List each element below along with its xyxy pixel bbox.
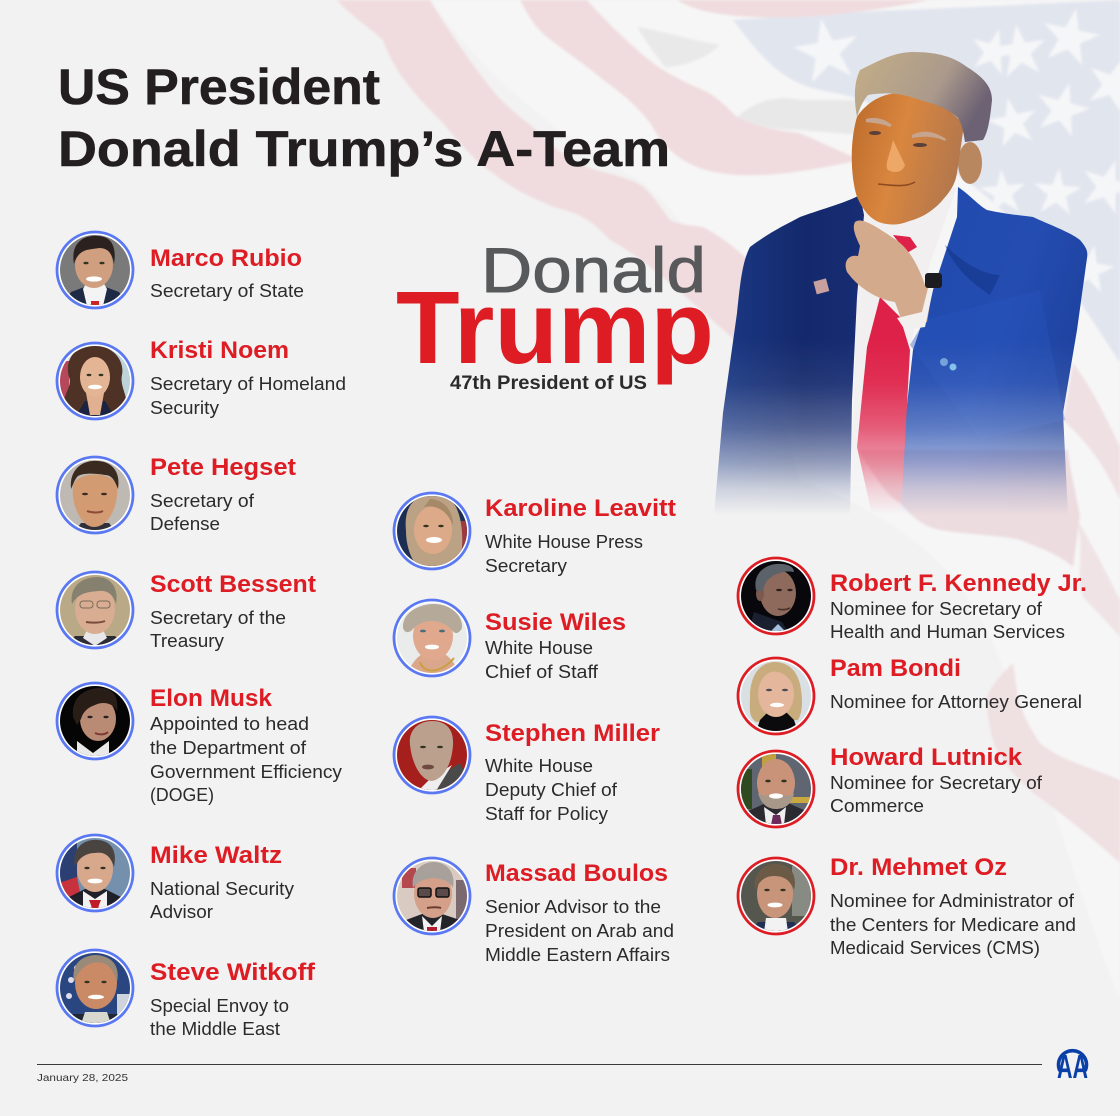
profile: Pete Hegset bbox=[57, 454, 296, 534]
lapel pin bbox=[813, 278, 829, 294]
role: Health and Human Services bbox=[830, 621, 1065, 642]
role: Nominee for Secretary of bbox=[830, 598, 1043, 619]
headline: Donald Trump: Donald bbox=[481, 236, 706, 306]
role bbox=[150, 490, 255, 534]
photo: Scott Bessent bbox=[57, 572, 133, 648]
role: Nominee for Secretary of bbox=[830, 772, 1043, 793]
name: Dr. Mehmet Oz bbox=[830, 854, 1007, 881]
sleeve buttons bbox=[940, 358, 948, 366]
role: the Department of bbox=[150, 737, 307, 758]
role: Deputy Chief of bbox=[485, 779, 618, 800]
photo: Howard Lutnick bbox=[738, 751, 814, 827]
flag backdrop bbox=[337, 0, 1120, 1000]
name: Robert F. Kennedy Jr. bbox=[830, 570, 1087, 597]
name: Pam Bondi bbox=[830, 655, 961, 682]
role: President on Arab and bbox=[485, 920, 674, 941]
title: US President bbox=[58, 59, 380, 115]
role bbox=[150, 995, 289, 1039]
photo: Steve Witkoff bbox=[57, 950, 133, 1026]
role: Appointed to head bbox=[150, 713, 309, 734]
sleeve shading bbox=[910, 328, 1065, 423]
title: Donald Trump’s A-Team bbox=[58, 121, 670, 177]
jacket left bbox=[714, 195, 864, 515]
profile: Howard Lutnick bbox=[738, 744, 1043, 827]
logo: Anadolu Agency bbox=[1057, 1048, 1088, 1085]
name: Mike Waltz bbox=[150, 842, 282, 869]
role: Nominee for Attorney General bbox=[830, 691, 1082, 712]
name: Stephen Miller bbox=[485, 720, 660, 747]
profile: Steve Witkoff bbox=[57, 950, 316, 1039]
role: Medicaid Services (CMS) bbox=[830, 937, 1040, 958]
face bbox=[852, 93, 964, 225]
role: Government Efficiency bbox=[150, 761, 343, 782]
profile: Marco Rubio bbox=[57, 232, 304, 308]
role bbox=[150, 713, 343, 805]
name: Elon Musk bbox=[150, 685, 273, 712]
logo: Anadolu Agency: AA bbox=[1057, 1048, 1088, 1085]
profile: Robert F. Kennedy Jr. bbox=[738, 558, 1087, 642]
jacket right bbox=[895, 187, 1087, 515]
role: National Security bbox=[150, 878, 295, 899]
role: White House bbox=[485, 755, 593, 776]
portrait: Donald Trump bbox=[714, 52, 1087, 515]
tie bbox=[857, 235, 917, 515]
profile: Stephen Miller bbox=[394, 717, 660, 824]
profile: Susie Wiles bbox=[394, 600, 626, 682]
photo: Elon Musk bbox=[57, 683, 133, 759]
role: Defense bbox=[150, 513, 220, 534]
pointing hand bbox=[846, 221, 932, 330]
role: White House bbox=[485, 637, 593, 658]
shirt cuff bbox=[897, 288, 933, 330]
name: Pete Hegset bbox=[150, 454, 296, 481]
name: Howard Lutnick bbox=[830, 744, 1023, 771]
shirt bbox=[850, 187, 957, 515]
photo: Pete Hegset bbox=[57, 457, 133, 533]
photo: Pam Bondi bbox=[738, 658, 814, 734]
hair bbox=[855, 52, 992, 142]
role: Treasury bbox=[150, 630, 225, 651]
role bbox=[830, 772, 1043, 816]
role: White House Press bbox=[485, 531, 643, 552]
name: Steve Witkoff bbox=[150, 959, 316, 986]
role: Security bbox=[150, 397, 220, 418]
role bbox=[150, 878, 295, 922]
photo: Massad Boulos bbox=[394, 858, 470, 934]
role bbox=[830, 890, 1076, 958]
ear bbox=[958, 142, 982, 184]
photo: Robert F. Kennedy Jr. bbox=[738, 558, 814, 634]
profile: Karoline Leavitt bbox=[394, 493, 676, 576]
role: Secretary of the bbox=[150, 607, 286, 628]
photo: Stephen Miller bbox=[394, 717, 470, 793]
role bbox=[485, 637, 599, 682]
role: the Centers for Medicare and bbox=[830, 914, 1076, 935]
role bbox=[150, 373, 346, 418]
date: January 28, 2025 bbox=[37, 1072, 128, 1084]
name: Kristi Noem bbox=[150, 337, 289, 364]
role: Secretary bbox=[485, 555, 568, 576]
photo: Karoline Leavitt bbox=[394, 493, 470, 569]
profile: Kristi Noem bbox=[57, 337, 346, 419]
role: the Middle East bbox=[150, 1018, 280, 1039]
photo: Dr. Mehmet Oz bbox=[738, 858, 814, 934]
name: Marco Rubio bbox=[150, 245, 302, 272]
role bbox=[485, 755, 618, 824]
role: Secretary of bbox=[150, 490, 255, 511]
role: Senior Advisor to the bbox=[485, 896, 661, 917]
profile: Pam Bondi bbox=[738, 655, 1082, 734]
profile: Elon Musk bbox=[57, 683, 343, 805]
name: Massad Boulos bbox=[485, 860, 668, 887]
facial features bbox=[866, 118, 946, 186]
name: Scott Bessent bbox=[150, 571, 316, 598]
role: (DOGE) bbox=[150, 784, 214, 805]
headline: Donald Trump: 47th President of US bbox=[450, 373, 647, 394]
title bbox=[58, 59, 670, 177]
photo: Kristi Noem bbox=[57, 343, 133, 419]
profile: Scott Bessent bbox=[57, 571, 316, 651]
role: Middle Eastern Affairs bbox=[485, 944, 670, 965]
role: Chief of Staff bbox=[485, 661, 599, 682]
role bbox=[830, 598, 1065, 642]
role: Staff for Policy bbox=[485, 803, 609, 824]
name: Karoline Leavitt bbox=[485, 495, 676, 522]
photo: Marco Rubio bbox=[57, 232, 133, 308]
profile: Dr. Mehmet Oz bbox=[738, 854, 1076, 958]
role: Commerce bbox=[830, 795, 924, 816]
role: Nominee for Administrator of bbox=[830, 890, 1075, 911]
microphone bbox=[925, 273, 942, 288]
photo: Susie Wiles bbox=[394, 600, 470, 676]
role: Secretary of State bbox=[150, 280, 304, 301]
profile: Massad Boulos bbox=[394, 858, 674, 965]
role: Secretary of Homeland bbox=[150, 373, 346, 394]
role bbox=[485, 531, 643, 576]
role: Advisor bbox=[150, 901, 213, 922]
role: Special Envoy to bbox=[150, 995, 289, 1016]
name: Susie Wiles bbox=[485, 609, 626, 636]
headline: Donald Trump: Trump bbox=[396, 270, 714, 385]
profile: Mike Waltz bbox=[57, 835, 295, 922]
photo: Mike Waltz bbox=[57, 835, 133, 911]
role bbox=[150, 607, 286, 651]
role bbox=[485, 896, 674, 965]
